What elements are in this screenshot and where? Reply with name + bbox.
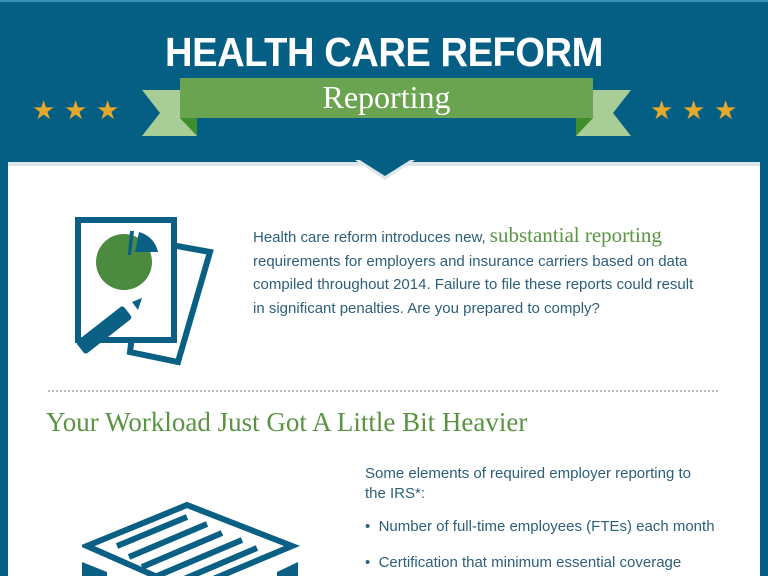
ribbon banner [32,78,737,136]
stars: ★ [682,96,705,126]
intro text: compiled throughout 2014. Failure to file these reports could result [253,276,693,293]
stars: ★ [64,96,87,126]
stars: ★ [32,96,55,126]
list of reporting elements [365,465,715,576]
intro text: Health care reform introduces new, substantial reporting [253,223,662,247]
dotted divider [48,390,718,392]
stars: ★ [714,96,737,126]
stars: ★ [650,96,673,126]
list of reporting elements: the IRS*: [365,485,425,502]
list of reporting elements: Some elements of required employer reporting to [365,465,691,482]
notch [355,160,415,180]
subtitle: Reporting [322,79,450,115]
stars [32,96,737,126]
icon: report with pie chart [75,217,214,366]
icon: stack of papers [82,502,300,576]
ribbon body [180,78,593,118]
section heading: Your Workload Just Got A Little Bit Heavier [46,407,527,437]
intro text: in significant penalties. Are you prepared to comply? [253,300,600,316]
title: HEALTH CARE REFORM [165,29,603,75]
white panel [8,162,760,576]
list of reporting elements: • Number of full-time employees (FTEs) each month [365,518,715,535]
stars: ★ [96,96,119,126]
ribbon tails [142,90,631,136]
list of reporting elements: • Certification that minimum essential coverage [365,554,681,571]
intro text [253,223,694,316]
intro text: requirements for employers and insurance carriers based on data [253,252,687,270]
